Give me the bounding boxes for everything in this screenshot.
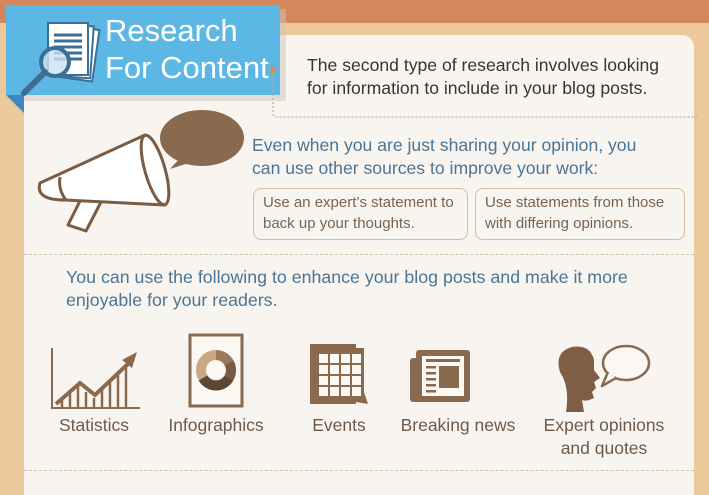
box: differing opinions: Use statements from those <box>485 194 664 211</box>
divider <box>24 254 694 255</box>
intro text: The second type of research involves looking <box>307 55 659 75</box>
title text: For Content <box>105 50 269 85</box>
box: differing opinions: with differing opinions. <box>485 215 633 232</box>
subheading: opinion: can use other sources to improve your work: <box>252 158 598 178</box>
box: expert statement <box>253 188 468 240</box>
intro text: for information to include in your blog posts. <box>307 78 647 98</box>
box: expert statement: back up your thoughts. <box>263 215 415 232</box>
icon: newspaper <box>410 350 470 402</box>
label: expert opinions <box>544 415 664 458</box>
box: differing opinions <box>475 188 685 240</box>
top orange bar <box>0 0 709 23</box>
label: infographics: Infographics <box>168 415 264 435</box>
label: expert opinions: and quotes <box>561 438 647 458</box>
text: enhance <box>66 267 628 310</box>
icon: infographics <box>188 334 244 408</box>
icon: expert head with speech bubble <box>558 344 650 412</box>
icon: events calendar <box>310 344 368 404</box>
label: expert opinions: Expert opinions <box>544 415 664 435</box>
title text: Research <box>105 13 238 48</box>
subheading: opinion <box>252 135 636 178</box>
banner fold <box>6 95 24 113</box>
text: enhance: You can use the following to enhance your blog posts and make it more <box>66 267 628 287</box>
box: expert statement: Use an expert’s statement to <box>263 194 454 211</box>
label: statistics: Statistics <box>59 415 129 435</box>
intro text <box>307 55 659 98</box>
text: enhance: enjoyable for your readers. <box>66 290 278 310</box>
icon: statistics <box>51 348 140 409</box>
bottom divider <box>24 470 694 471</box>
subheading: opinion: Even when you are just sharing your opinion, you <box>252 135 636 155</box>
label: breaking news: Breaking news <box>401 415 515 435</box>
icon: megaphone with speech bubble <box>38 110 244 232</box>
icon: documents with magnifier <box>21 22 100 96</box>
title banner <box>6 5 286 113</box>
connector dotted line <box>270 66 698 118</box>
title text <box>105 13 269 85</box>
label: events: Events <box>312 415 366 435</box>
